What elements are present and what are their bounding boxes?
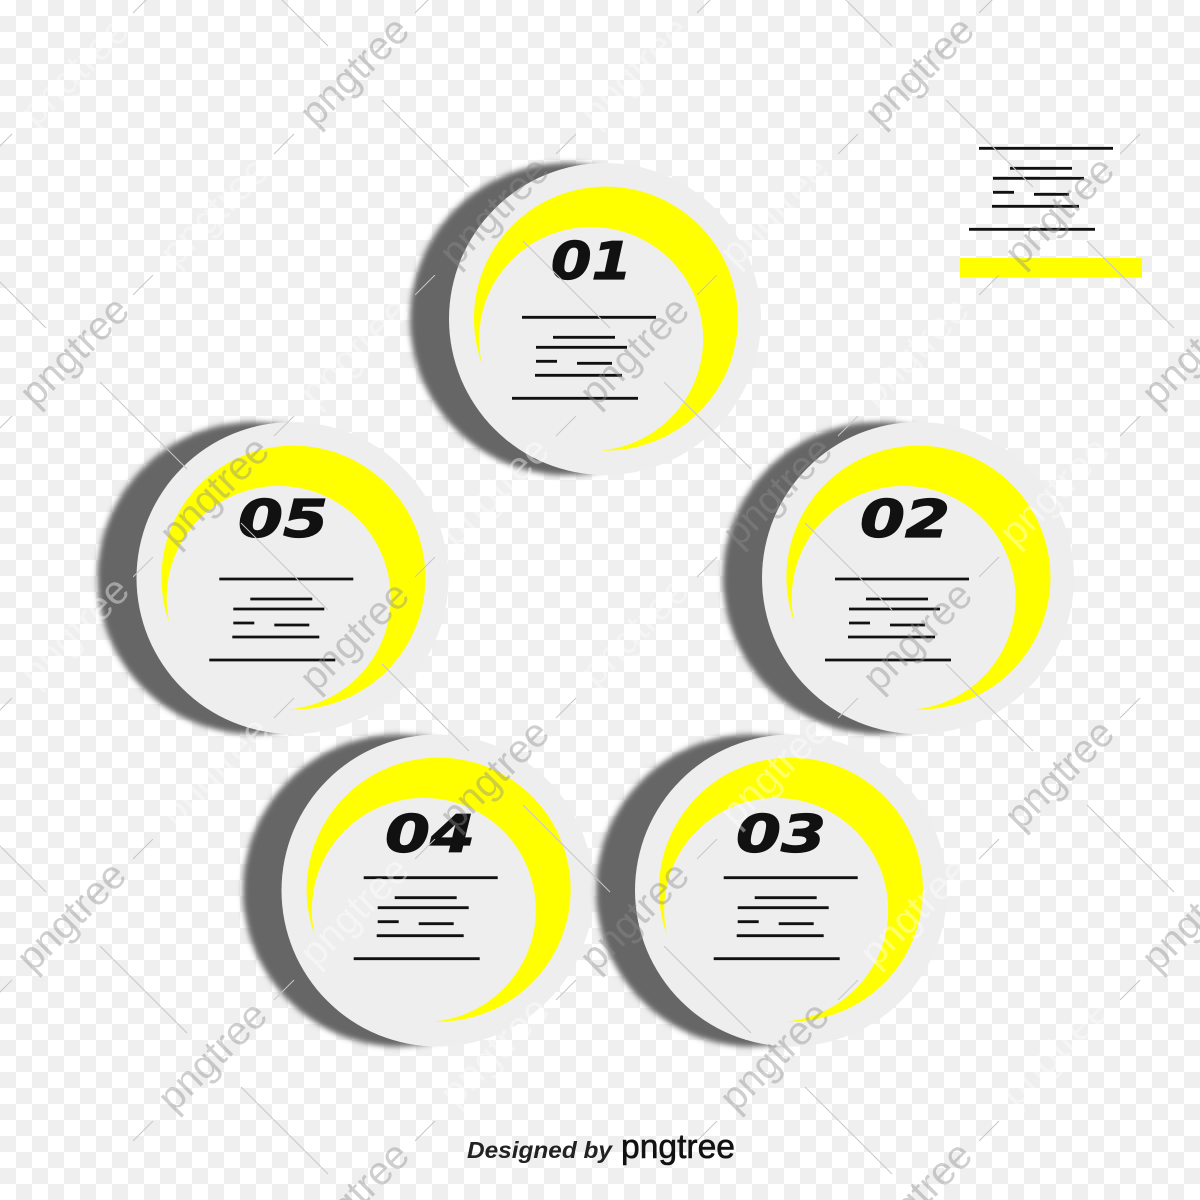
number 03: 03 xyxy=(736,805,826,865)
faint white watermarks: pngtree xyxy=(711,708,838,835)
grey watermarks: pngtree xyxy=(571,853,698,980)
number 04: 04 xyxy=(385,805,475,865)
faint white watermarks: pngtree xyxy=(11,8,138,135)
designed by label: Designed by xyxy=(467,1137,613,1163)
grey watermarks: pngtree xyxy=(996,148,1123,275)
grey watermarks: pngtree xyxy=(856,8,983,135)
panel: step 02 xyxy=(723,422,1074,734)
grey watermarks: pngtree xyxy=(151,428,278,555)
disc 05 xyxy=(136,422,448,734)
faint white watermarks: pngtree xyxy=(991,428,1118,555)
disc 02 xyxy=(762,422,1074,734)
faint white watermarks: pngtree xyxy=(851,288,978,415)
grey watermarks: pngtree xyxy=(149,993,276,1120)
faint white watermarks: pngtree xyxy=(11,568,138,695)
grey watermarks: pngtree xyxy=(291,573,418,700)
faint white watermarks: pngtree xyxy=(151,708,278,835)
shadow 01 xyxy=(410,163,722,475)
faint white watermarks: pngtree xyxy=(151,148,278,275)
panel: step 03 xyxy=(596,734,947,1046)
faint white watermarks: pngtree xyxy=(851,848,978,975)
grey watermarks: pngtree xyxy=(431,148,558,275)
crescent 01 xyxy=(474,187,738,451)
grey watermarks: pngtree xyxy=(996,711,1123,838)
number 02: 02 xyxy=(860,490,950,550)
legend yellow bar xyxy=(960,258,1142,278)
grey watermarks: pngtree xyxy=(714,428,841,555)
crescent 04 xyxy=(307,758,571,1022)
panel: step 04 xyxy=(243,734,594,1046)
grey watermarks: pngtree xyxy=(11,288,138,415)
disc 04 xyxy=(282,734,594,1046)
faint white watermarks: pngtree xyxy=(291,288,418,415)
faint white watermarks: pngtree xyxy=(291,848,418,975)
shadow 02 xyxy=(723,422,1035,734)
panel: step 01 xyxy=(410,163,761,475)
number 05: 05 xyxy=(238,490,328,550)
text lines 05 xyxy=(209,579,353,660)
crescent 05 xyxy=(161,446,425,710)
footer credit xyxy=(467,1128,735,1166)
text lines 02 xyxy=(825,579,969,660)
faint white watermarks: pngtree xyxy=(571,8,698,135)
legend text lines xyxy=(969,148,1113,229)
legend block xyxy=(960,148,1142,278)
grey watermarks: pngtree xyxy=(8,853,135,980)
faint white watermarks: pngtree xyxy=(431,428,558,555)
number 01: 01 xyxy=(551,232,632,292)
grey watermarks: pngtree xyxy=(854,573,981,700)
shadow 03 xyxy=(596,734,908,1046)
grey watermarks: pngtree xyxy=(711,993,838,1120)
disc 01 xyxy=(449,163,761,475)
text lines 03 xyxy=(714,878,858,959)
grey watermarks: pngtree xyxy=(571,288,698,415)
faint white watermarks: pngtree xyxy=(571,568,698,695)
grey watermarks: pngtree xyxy=(431,711,558,838)
faint white watermarks: pngtree xyxy=(711,148,838,275)
disc 03 xyxy=(635,734,947,1046)
faint white watermarks: pngtree xyxy=(991,988,1118,1115)
text lines 04 xyxy=(354,878,498,959)
crescent 02 xyxy=(786,446,1050,710)
crescent 03 xyxy=(659,758,923,1022)
faint white watermarks: pngtree xyxy=(431,988,558,1115)
shadow 05 xyxy=(98,422,410,734)
grey watermarks: pngtree xyxy=(291,8,418,135)
text lines 01 xyxy=(512,317,656,398)
panel: step 05 xyxy=(98,422,448,734)
shadow 04 xyxy=(243,734,555,1046)
brand name: pngtree xyxy=(621,1128,735,1166)
